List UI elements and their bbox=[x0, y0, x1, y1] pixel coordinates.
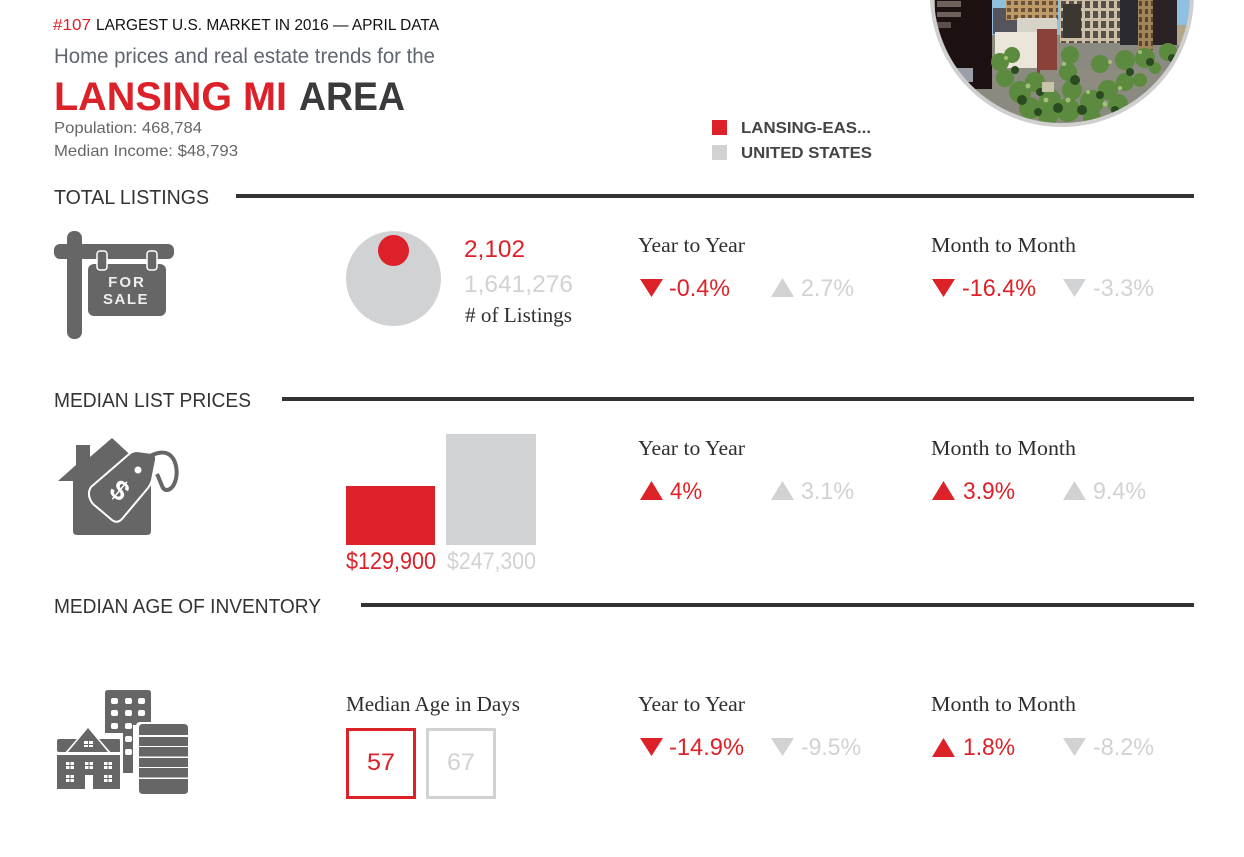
median age boxes: 67 bbox=[447, 749, 475, 776]
listings year to year: 2.7% bbox=[801, 275, 854, 302]
prices month to month: 3.9% bbox=[963, 478, 1015, 505]
prices year to year: Year to Year bbox=[638, 436, 745, 460]
prices month to month: Month to Month bbox=[931, 436, 1077, 460]
prices year to year: 4% bbox=[670, 478, 702, 505]
inventory year to year bbox=[638, 692, 861, 761]
inventory month to month: -8.2% bbox=[1093, 734, 1154, 761]
icon: house with price tag bbox=[58, 438, 177, 535]
median age boxes: 57 bbox=[367, 749, 395, 776]
section 1 heading: total listings: TOTAL LISTINGS bbox=[54, 187, 209, 209]
listings month to month bbox=[931, 233, 1154, 302]
listings values: 1,641,276 bbox=[464, 271, 573, 298]
prices year to year: 3.1% bbox=[801, 478, 854, 505]
median age boxes bbox=[346, 692, 520, 798]
bar chart: list prices: $129,900 bbox=[346, 548, 436, 575]
city photo bbox=[930, 0, 1195, 130]
section 3 heading: median age of inventory bbox=[54, 596, 1194, 618]
listings values: 2,102 bbox=[464, 236, 525, 263]
section 2 heading: median list prices: MEDIAN LIST PRICES bbox=[54, 390, 251, 412]
icon: buildings bbox=[55, 690, 190, 796]
subtitle: Home prices and real estate trends for the bbox=[54, 45, 435, 68]
title: LANSING MI bbox=[54, 75, 287, 119]
legend: UNITED STATES bbox=[741, 145, 872, 162]
section 2 heading: median list prices bbox=[54, 390, 1194, 412]
icon: house with price tag: $ bbox=[104, 474, 136, 508]
prices year to year bbox=[638, 436, 854, 505]
legend: LANSING-EAS... bbox=[741, 120, 871, 137]
rank line: #107 bbox=[53, 17, 91, 34]
icon: for sale sign: FOR bbox=[108, 274, 146, 291]
demographics bbox=[54, 120, 238, 160]
title: AREA bbox=[299, 75, 405, 119]
icon: for sale sign bbox=[54, 231, 174, 339]
listings month to month: -3.3% bbox=[1093, 275, 1154, 302]
bar chart: list prices: $247,300 bbox=[447, 548, 536, 575]
listings year to year: Year to Year bbox=[638, 233, 745, 257]
section 3 heading: median age of inventory: MEDIAN AGE OF INVENTORY bbox=[54, 596, 321, 618]
demographics: Median Income: $48,793 bbox=[54, 143, 238, 160]
legend bbox=[712, 120, 872, 162]
listings circle chart bbox=[346, 231, 441, 326]
inventory month to month bbox=[931, 692, 1154, 761]
icon: for sale sign: SALE bbox=[103, 291, 149, 308]
prices month to month: 9.4% bbox=[1093, 478, 1146, 505]
inventory year to year: -9.5% bbox=[801, 734, 861, 761]
listings year to year bbox=[638, 233, 854, 302]
inventory month to month: Month to Month bbox=[931, 692, 1077, 716]
inventory month to month: 1.8% bbox=[963, 734, 1015, 761]
listings year to year: -0.4% bbox=[669, 275, 730, 302]
rank line: LARGEST U.S. MARKET IN 2016 — APRIL DATA bbox=[96, 17, 439, 34]
inventory year to year: -14.9% bbox=[669, 734, 744, 761]
bar chart: list prices bbox=[346, 434, 536, 575]
section 1 heading: total listings bbox=[54, 187, 1194, 209]
title bbox=[54, 75, 405, 119]
listings month to month: -16.4% bbox=[962, 275, 1036, 302]
listings values: # of Listings bbox=[465, 303, 572, 327]
listings month to month: Month to Month bbox=[931, 233, 1077, 257]
median age boxes: Median Age in Days bbox=[346, 692, 520, 716]
listings values bbox=[464, 236, 573, 327]
demographics: Population: 468,784 bbox=[54, 120, 202, 137]
prices month to month bbox=[931, 436, 1146, 505]
inventory year to year: Year to Year bbox=[638, 692, 745, 716]
